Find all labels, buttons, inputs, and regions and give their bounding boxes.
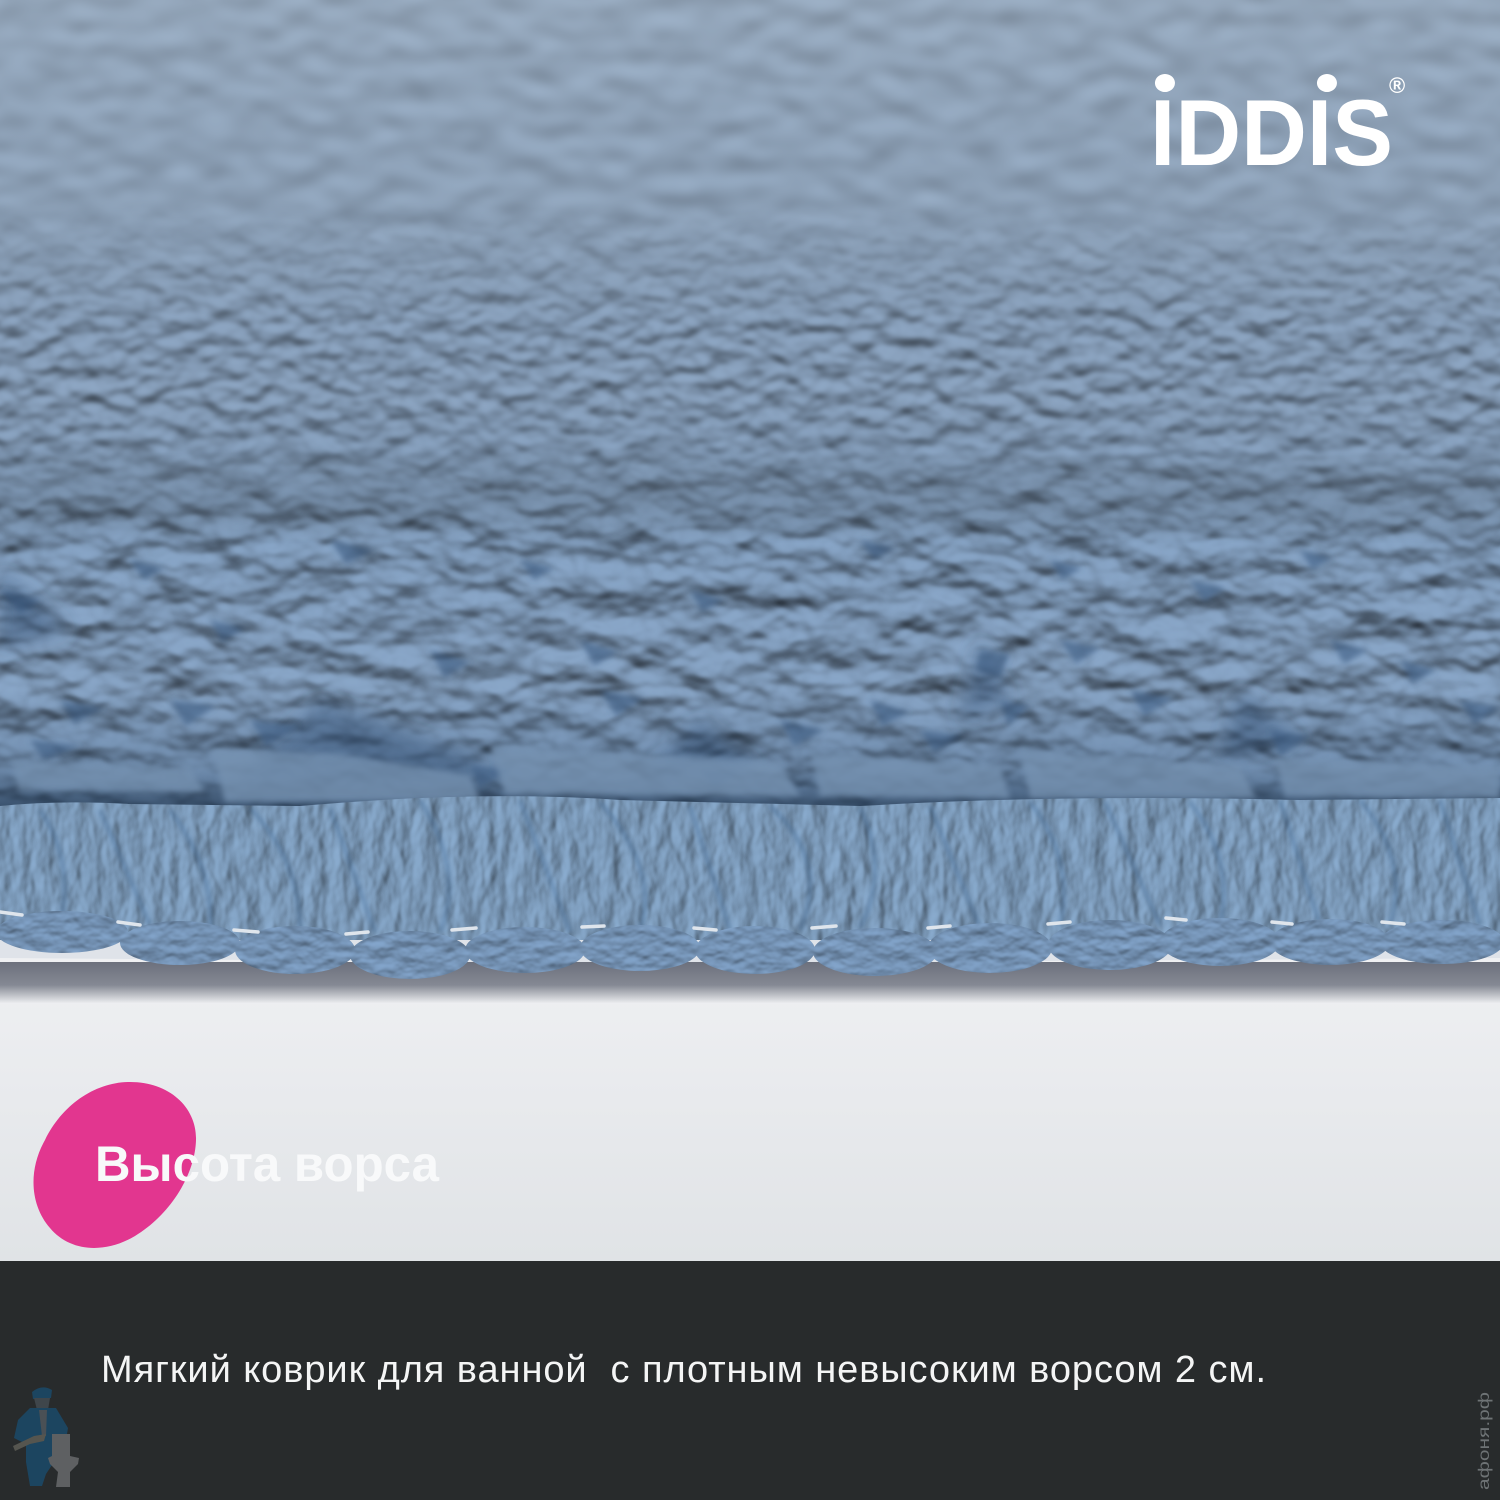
watermark: афоня.рф: [1476, 1392, 1493, 1490]
logo dots: [1155, 74, 1337, 92]
pink blob badge: [34, 1082, 196, 1248]
icon: plumber with toilet: [13, 1387, 79, 1487]
photo: rug surface: [0, 0, 1500, 830]
floor background: [0, 940, 1500, 1261]
photo: white stitch thread: [0, 912, 1404, 934]
logo wordmark: IDDIS: [1150, 80, 1393, 185]
photo: front pile tufts: [12, 745, 1500, 802]
registered mark: ®: [1389, 73, 1405, 98]
photo: tuft shadows: [0, 540, 1500, 788]
photo: braided rug border: [0, 796, 1500, 940]
shadow under rug: [0, 962, 1500, 1004]
dark footer band: [0, 1261, 1500, 1500]
description text: Мягкий коврик для ванной с плотным невысоким ворсом 2 см.: [101, 1349, 1266, 1391]
photo: white backing under rug edge: [0, 900, 1500, 962]
heading: Высота ворса: [95, 1136, 440, 1192]
photo: scalloped stitches: [0, 911, 1500, 979]
brand logo: [1150, 73, 1405, 185]
